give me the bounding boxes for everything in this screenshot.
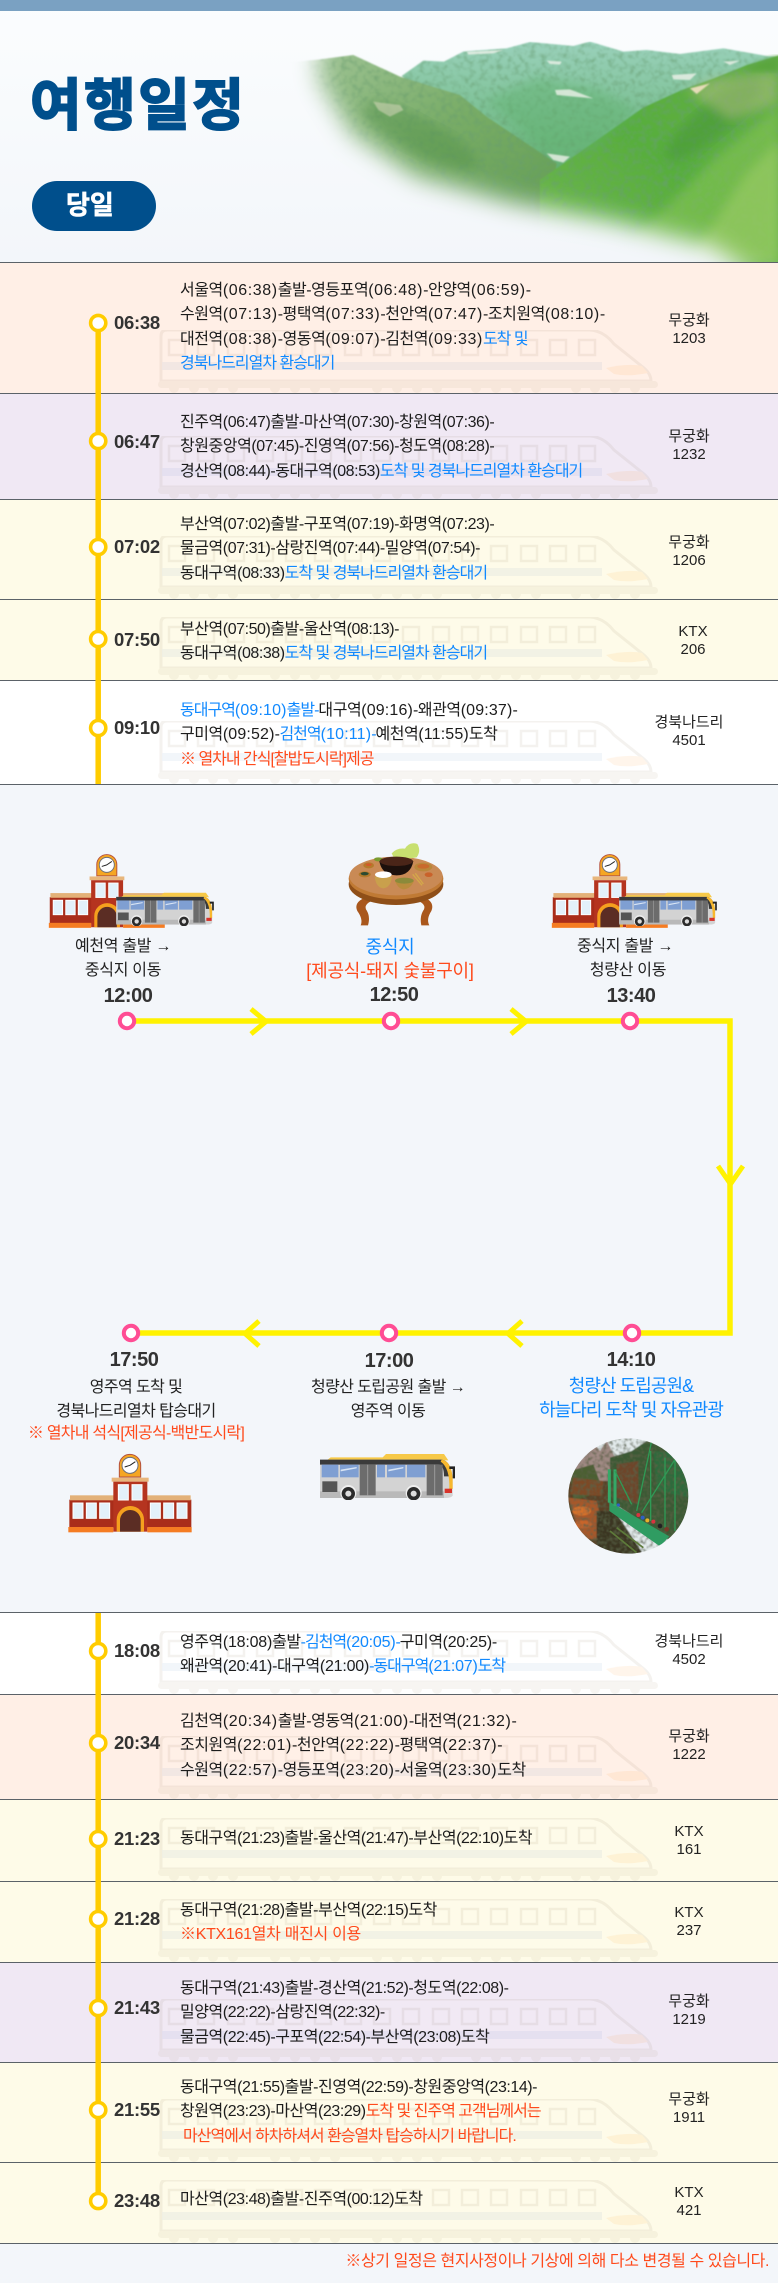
row: 07:02 Mugunghwa 1206: 동대구역(08:33)도착 및 경북나드리열차 환승대기 — [180, 565, 487, 582]
row: 06:47 Mugunghwa 1232: 06:47 — [114, 431, 160, 452]
row: 20:34 Mugunghwa 1222 — [0, 1694, 778, 1799]
row: 21:23 KTX 161: 161 — [676, 1841, 702, 1858]
row: 18:08 Gyeongbuk Nadri 4502: 경북나드리 — [654, 1633, 724, 1650]
label: departure Yecheon: 예천역 출발 → — [75, 938, 171, 955]
row: 23:48 KTX 421: KTX — [674, 2184, 704, 2201]
label: departure Yecheon — [75, 938, 171, 979]
row: 09:10 Gyeongbuk Nadri 4501: 09:10 — [114, 717, 160, 738]
row: 07:50 KTX 206 — [0, 599, 778, 680]
icon: Korean meal table — [348, 843, 444, 926]
time 13:40: 13:40 — [607, 985, 655, 1007]
time 12:00: 12:00 — [104, 985, 152, 1007]
row: 07:02 Mugunghwa 1206: 07:02 — [114, 536, 160, 557]
row: 06:38 Mugunghwa 1203: 경북나드리열차 환승대기 — [180, 355, 334, 372]
row: 06:47 Mugunghwa 1232: 무궁화 — [668, 428, 710, 445]
row: 09:10 Gyeongbuk Nadri 4501: 동대구역(09:10)출발-대구역(09:16)-왜관역(09:37)- — [180, 702, 517, 719]
row: 09:10 Gyeongbuk Nadri 4501: 경북나드리 — [654, 714, 724, 731]
row: 21:43 Mugunghwa 1219: 밀양역(22:22)-삼랑진역(22:32)- — [180, 2004, 385, 2021]
row: 21:55 Mugunghwa 1911: 21:55 — [114, 2099, 160, 2120]
row: 21:43 Mugunghwa 1219: 무궁화 — [668, 1993, 710, 2010]
badge: day trip: 당일 — [66, 190, 114, 220]
label: Cheongnyangsan park — [539, 1376, 724, 1420]
row: 21:55 Mugunghwa 1911: 1911 — [673, 2109, 705, 2126]
row: 06:47 Mugunghwa 1232: 1232 — [672, 446, 706, 463]
icon: bus — [320, 1454, 455, 1500]
time 12:50: 12:50 — [370, 984, 418, 1006]
row: 07:02 Mugunghwa 1206: 무궁화 — [668, 534, 710, 551]
row: 21:28 KTX 237 — [0, 1881, 778, 1962]
label: arrival Yeongju: 영주역 도착 및 — [90, 1379, 182, 1396]
row: 21:43 Mugunghwa 1219: 동대구역(21:43)출발-경산역(21:52)-청도역(22:08)- — [180, 1980, 509, 1997]
row: 21:43 Mugunghwa 1219: 21:43 — [114, 1997, 160, 2018]
footer note — [0, 2243, 778, 2283]
row: 20:34 Mugunghwa 1222: 수원역(22:57)-영등포역(23:20)-서울역(23:30)도착 — [180, 1762, 526, 1779]
row: 09:10 Gyeongbuk Nadri 4501: ※ 열차내 간식[찰밥도시락]제공 — [180, 751, 373, 768]
row: 07:02 Mugunghwa 1206: 물금역(07:31)-삼랑진역(07:44)-밀양역(07:54)- — [180, 540, 480, 557]
row: 06:38 Mugunghwa 1203: 무궁화 — [668, 312, 710, 329]
label: departure Cheongnyangsan — [311, 1378, 465, 1420]
icon: station and bus — [48, 854, 214, 928]
row: 06:47 Mugunghwa 1232: 창원중앙역(07:45)-진영역(07:56)-청도역(08:28)- — [180, 438, 494, 455]
row: 21:28 KTX 237: 동대구역(21:28)출발-부산역(22:15)도착 — [180, 1902, 437, 1919]
row: 06:38 Mugunghwa 1203: 서울역(06:38)출발-영등포역(06:48)-안양역(06:59)- — [180, 282, 531, 299]
panel: sightseeing route — [0, 784, 778, 1612]
route line with arrows and stops — [118, 1007, 745, 1348]
row: 18:08 Gyeongbuk Nadri 4502 — [0, 1612, 778, 1694]
row: 18:08 Gyeongbuk Nadri 4502: 4502 — [672, 1651, 706, 1668]
row: 06:38 Mugunghwa 1203: 1203 — [672, 330, 706, 347]
photo: sky bridge — [568, 1438, 688, 1554]
badge: day trip — [32, 181, 156, 231]
row: 21:55 Mugunghwa 1911 — [0, 2062, 778, 2162]
header background — [0, 0, 778, 262]
row: 21:23 KTX 161: 동대구역(21:23)출발-울산역(21:47)-부산역(22:10)도착 — [180, 1830, 532, 1847]
row: 07:02 Mugunghwa 1206 — [0, 499, 778, 599]
row: 21:23 KTX 161: KTX — [674, 1823, 704, 1840]
label: departure lunch place: 중식지 출발 → — [577, 938, 673, 955]
row: 07:02 Mugunghwa 1206: 1206 — [672, 552, 706, 569]
row: 21:43 Mugunghwa 1219: 물금역(22:45)-구포역(22:54)-부산역(23:08)도착 — [180, 2029, 489, 2046]
row: 09:10 Gyeongbuk Nadri 4501: 구미역(09:52)-김천역(10:11)-예천역(11:55)도착 — [180, 726, 497, 743]
row: 21:23 KTX 161 — [0, 1799, 778, 1881]
label: departure lunch place: 청량산 이동 — [590, 962, 666, 979]
row: 21:55 Mugunghwa 1911: 창원역(23:23)-마산역(23:29)도착 및 진주역 고객님께서는 — [180, 2103, 541, 2120]
row: 21:28 KTX 237: 21:28 — [114, 1908, 160, 1929]
row: 21:43 Mugunghwa 1219: 1219 — [672, 2011, 706, 2028]
row: 07:50 KTX 206: 206 — [680, 641, 706, 658]
note: dinner: ※ 열차내 석식[제공식-백반도시락] — [28, 1425, 244, 1442]
icon: station — [68, 1454, 192, 1532]
row: 21:55 Mugunghwa 1911: 마산역에서 하차하셔서 환승열차 탑승하시기 바랍니다. — [183, 2128, 516, 2145]
label: arrival Yeongju — [56, 1378, 216, 1420]
row: 18:08 Gyeongbuk Nadri 4502: 영주역(18:08)출발-김천역(20:05)-구미역(20:25)- — [180, 1634, 497, 1651]
row: 21:23 KTX 161: 21:23 — [114, 1828, 160, 1849]
row: 07:50 KTX 206: KTX — [678, 623, 708, 640]
row: 06:38 Mugunghwa 1203: 대전역(08:38)-영동역(09:07)-김천역(09:33)도착 및 — [180, 331, 528, 348]
label: lunch — [306, 937, 474, 981]
row: 21:55 Mugunghwa 1911: 무궁화 — [668, 2091, 710, 2108]
footer note: ※상기 일정은 현지사정이나 기상에 의해 다소 변경될 수 있습니다. — [345, 2253, 769, 2270]
title: 여행일정 — [30, 74, 246, 137]
row: 06:47 Mugunghwa 1232: 진주역(06:47)출발-마산역(07:30)-창원역(07:36)- — [180, 414, 494, 431]
header image: mountains — [302, 42, 778, 262]
time 17:00: 17:00 — [365, 1350, 413, 1372]
label: departure Cheongnyangsan: 영주역 이동 — [351, 1403, 425, 1420]
row: 06:47 Mugunghwa 1232: 경산역(08:44)-동대구역(08:53)도착 및 경북나드리열차 환승대기 — [180, 463, 582, 480]
row: 20:34 Mugunghwa 1222: 1222 — [672, 1746, 706, 1763]
row: 07:02 Mugunghwa 1206: 부산역(07:02)출발-구포역(07:19)-화명역(07:23)- — [180, 516, 494, 533]
row: 20:34 Mugunghwa 1222: 조치원역(22:01)-천안역(22:22)-평택역(22:37)- — [180, 1737, 502, 1754]
row: 09:10 Gyeongbuk Nadri 4501: 4501 — [672, 732, 706, 749]
row: 20:34 Mugunghwa 1222: 20:34 — [114, 1732, 160, 1753]
row: 21:28 KTX 237: KTX — [674, 1904, 704, 1921]
row: 20:34 Mugunghwa 1222: 무궁화 — [668, 1728, 710, 1745]
label: departure lunch place — [577, 938, 673, 979]
row: 21:28 KTX 237: 237 — [676, 1922, 702, 1939]
row: 06:38 Mugunghwa 1203: 수원역(07:13)-평택역(07:33)-천안역(07:47)-조치원역(08:10)- — [180, 306, 605, 323]
row: 07:50 KTX 206: 07:50 — [114, 629, 160, 650]
row: 06:47 Mugunghwa 1232 — [0, 393, 778, 499]
row: 06:38 Mugunghwa 1203: 06:38 — [114, 312, 160, 333]
row: 09:10 Gyeongbuk Nadri 4501 — [0, 680, 778, 784]
row: 23:48 KTX 421 — [0, 2162, 778, 2243]
label: Cheongnyangsan park: 하늘다리 도착 및 자유관광 — [539, 1400, 723, 1420]
row: 23:48 KTX 421: 23:48 — [114, 2190, 160, 2211]
label: Cheongnyangsan park: 청량산 도립공원& — [569, 1376, 693, 1396]
label: arrival Yeongju: 경북나드리열차 탑승대기 — [56, 1403, 216, 1420]
row: 23:48 KTX 421: 마산역(23:48)출발-진주역(00:12)도착 — [180, 2191, 423, 2208]
row: 06:38 Mugunghwa 1203 — [0, 262, 778, 393]
row: 23:48 KTX 421: 421 — [676, 2202, 702, 2219]
row: 20:34 Mugunghwa 1222: 김천역(20:34)출발-영동역(21:00)-대전역(21:32)- — [180, 1713, 516, 1730]
row: 21:43 Mugunghwa 1219 — [0, 1962, 778, 2062]
label: lunch: [제공식-돼지 숯불구이] — [306, 961, 474, 981]
label: lunch: 중식지 — [365, 937, 415, 957]
time 17:50: 17:50 — [110, 1349, 158, 1371]
row: 21:28 KTX 237: ※KTX161열차 매진시 이용 — [180, 1926, 361, 1943]
top bar — [0, 0, 778, 11]
label: departure Yecheon: 중식지 이동 — [85, 962, 161, 979]
row: 18:08 Gyeongbuk Nadri 4502: 18:08 — [114, 1640, 160, 1661]
row: 07:50 KTX 206: 부산역(07:50)출발-울산역(08:13)- — [180, 621, 399, 638]
row: 21:55 Mugunghwa 1911: 동대구역(21:55)출발-진영역(22:59)-창원중앙역(23:14)- — [180, 2079, 537, 2096]
row: 07:50 KTX 206: 동대구역(08:38)도착 및 경북나드리열차 환승대기 — [180, 645, 487, 662]
row: 18:08 Gyeongbuk Nadri 4502: 왜관역(20:41)-대구역(21:00)-동대구역(21:07)도착 — [180, 1658, 505, 1675]
time 14:10: 14:10 — [607, 1349, 655, 1371]
label: departure Cheongnyangsan: 청량산 도립공원 출발 → — [311, 1379, 465, 1396]
icon: station and bus — [552, 854, 717, 928]
